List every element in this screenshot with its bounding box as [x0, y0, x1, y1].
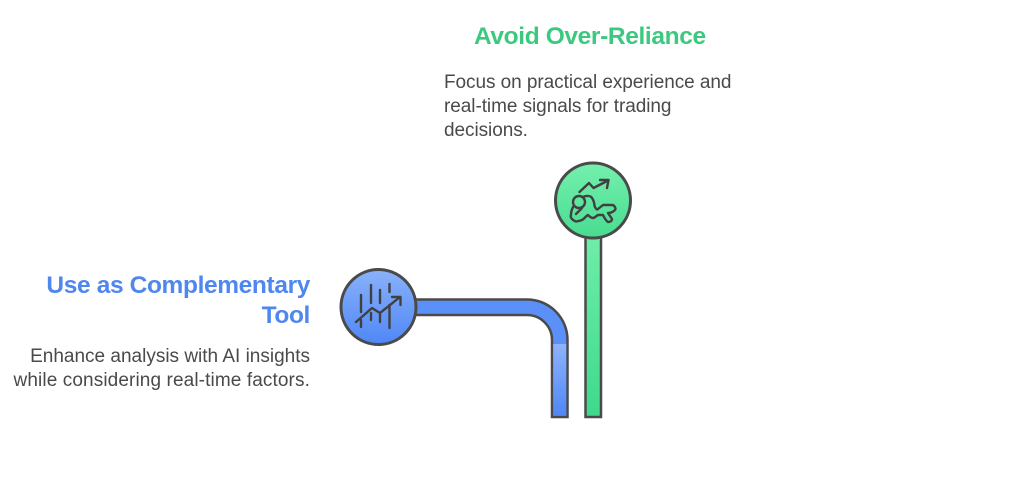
icon: green circle with chart and hand — [556, 163, 630, 238]
heading: Use as Complementary Tool: Tool — [262, 302, 310, 328]
text: Avoid Over-Reliance description: Focus on practical experience and — [444, 72, 731, 93]
pipe: green vertical — [586, 232, 601, 417]
text: Use as Complementary Tool description: Enhance analysis with AI insights — [30, 346, 310, 367]
text: Avoid Over-Reliance description: real-time signals for trading — [444, 96, 671, 117]
text: Avoid Over-Reliance description: decisions. — [444, 120, 528, 141]
icon: blue circle with bar chart and arrow — [341, 270, 416, 344]
pipe: blue elbow — [410, 300, 568, 417]
heading: Avoid Over-Reliance: Avoid Over-Reliance — [474, 22, 706, 50]
text: Use as Complementary Tool description — [14, 346, 310, 391]
text: Use as Complementary Tool description: while considering real-time factors. — [14, 370, 310, 391]
heading: Use as Complementary Tool — [46, 272, 310, 328]
heading: Use as Complementary Tool: Use as Complementary — [46, 272, 310, 298]
text: Avoid Over-Reliance description — [444, 72, 731, 141]
